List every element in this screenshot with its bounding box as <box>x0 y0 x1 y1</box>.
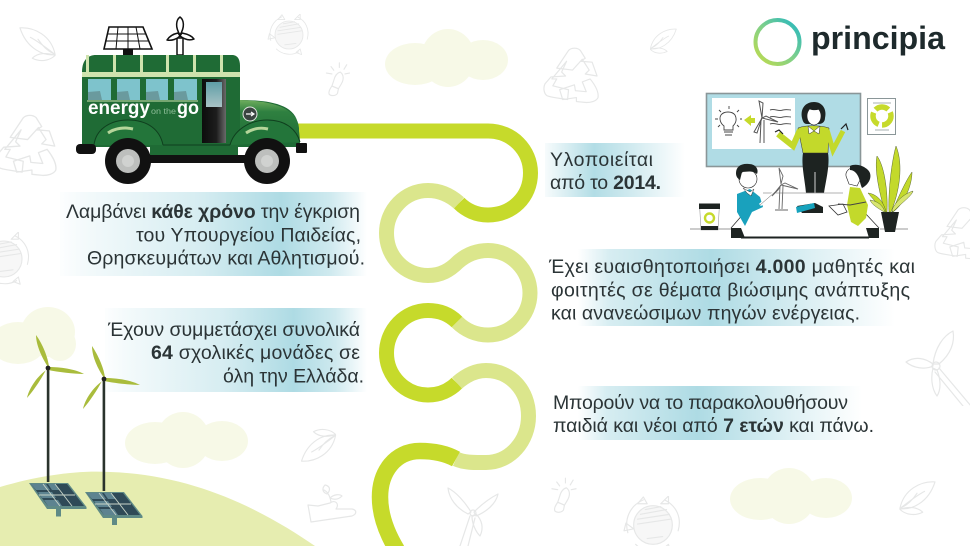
text panel: since 2014: Υλοποιείται <box>550 149 653 171</box>
text panel: 4000 students: φοιτητές σε θέματα βιώσιμης ανάπτυξης <box>551 280 910 302</box>
chassis and bumpers <box>150 147 238 155</box>
fenders <box>94 120 163 145</box>
text panel: age 7 and up <box>553 386 874 440</box>
paper on board <box>712 98 795 149</box>
road segment 1 <box>296 131 530 215</box>
bus lettering: energy <box>88 98 150 119</box>
recycling bin <box>699 204 720 230</box>
girl <box>838 165 870 226</box>
floor line <box>690 228 908 230</box>
cloud: left <box>0 307 76 364</box>
text panel: participating schools: όλη την Ελλάδα. <box>223 366 364 388</box>
boy <box>736 164 775 226</box>
windows <box>87 79 198 102</box>
classroom illustration <box>690 94 913 238</box>
background icon: globe left <box>0 232 29 284</box>
text panel: age 7 and up: παιδιά και νέοι από 7 ετών και πάνω. <box>553 415 874 437</box>
road segment 2 <box>386 190 530 335</box>
solar panel 1 <box>29 483 86 516</box>
logo <box>756 20 945 64</box>
roof stripes <box>82 55 240 77</box>
wind turbines on hill <box>27 335 140 491</box>
arrow drawing <box>744 115 755 126</box>
poster <box>868 98 896 134</box>
winding road <box>296 131 530 546</box>
text panel: 4000 students: Έχει ευαισθητοποιήσει 4.000 μαθητές και <box>548 256 915 278</box>
turbine 1 <box>27 335 84 482</box>
background icon: recycle left <box>0 115 56 175</box>
solar panel 2 <box>85 492 142 525</box>
front wheel <box>244 138 290 184</box>
bus lettering: on the <box>151 107 177 116</box>
background icon: hand with plant <box>308 485 356 522</box>
rear wheel <box>105 138 151 184</box>
text panel: since 2014 <box>545 143 685 197</box>
table <box>731 193 880 238</box>
logo wordmark: principia <box>811 20 945 56</box>
text panel: 4000 students <box>548 249 915 326</box>
background icon: leaf top left <box>20 28 55 61</box>
background icon: turbine right <box>906 331 970 406</box>
emblem <box>243 107 257 121</box>
text panel: yearly approval: Θρησκευμάτων και Αθλητισμού. <box>87 248 365 270</box>
road segment 4 <box>456 370 528 463</box>
board <box>706 94 860 166</box>
solar panel on roof <box>104 27 152 55</box>
teacher <box>775 102 848 193</box>
door <box>202 79 226 143</box>
background icon: leaf lower left <box>302 429 336 461</box>
books <box>796 203 823 213</box>
background icon: recycle top <box>544 48 598 103</box>
road segment 3 <box>386 310 457 395</box>
text panel: yearly approval: του Υπουργείου Παιδείας, <box>136 224 361 246</box>
text panel: yearly approval: Λαμβάνει κάθε χρόνο την έγκριση <box>66 201 360 223</box>
logo ring <box>756 20 800 64</box>
plant <box>868 146 913 232</box>
text panel: participating schools: 64 σχολικές μονάδες σε <box>151 342 360 364</box>
cloud: top centre <box>385 29 508 87</box>
turbine 2 <box>83 346 140 491</box>
text panel: age 7 and up: Μπορούν να το παρακολουθήσουν <box>553 392 848 414</box>
background icon: leaf top <box>650 29 676 53</box>
cloud: lower right <box>730 468 852 524</box>
bus <box>76 17 307 184</box>
background icon: turbine bottom <box>448 488 498 546</box>
text panel: yearly approval <box>60 192 367 276</box>
notebook <box>829 204 847 215</box>
background icon: leaf bottom right <box>900 482 935 514</box>
small turbine model <box>772 168 798 210</box>
hood <box>240 100 299 147</box>
background icon: globe bottom <box>624 496 679 546</box>
text panel: since 2014: από το 2014. <box>550 172 661 194</box>
text panel: participating schools: Έχουν συμμετάσχει συνολικά <box>107 319 360 341</box>
background icon: bulb bottom <box>552 478 576 512</box>
background icon: recycle right <box>935 208 970 259</box>
road segment 5 <box>380 451 456 546</box>
bus lettering: go <box>177 98 199 119</box>
hill <box>0 472 315 546</box>
text panel: participating schools <box>105 308 367 392</box>
cloud: lower left <box>125 412 248 468</box>
background icon: bulb top <box>326 63 350 96</box>
bus lettering <box>88 98 199 119</box>
bulb drawing <box>715 106 742 135</box>
text panel: 4000 students: και ανανεώσιμων πηγών ενέργειας. <box>551 302 860 324</box>
background icon: globe top <box>268 14 308 55</box>
bus body <box>82 55 240 100</box>
turbine drawing <box>754 101 791 143</box>
turbine on roof <box>167 17 194 55</box>
decoration: clouds <box>0 29 852 524</box>
